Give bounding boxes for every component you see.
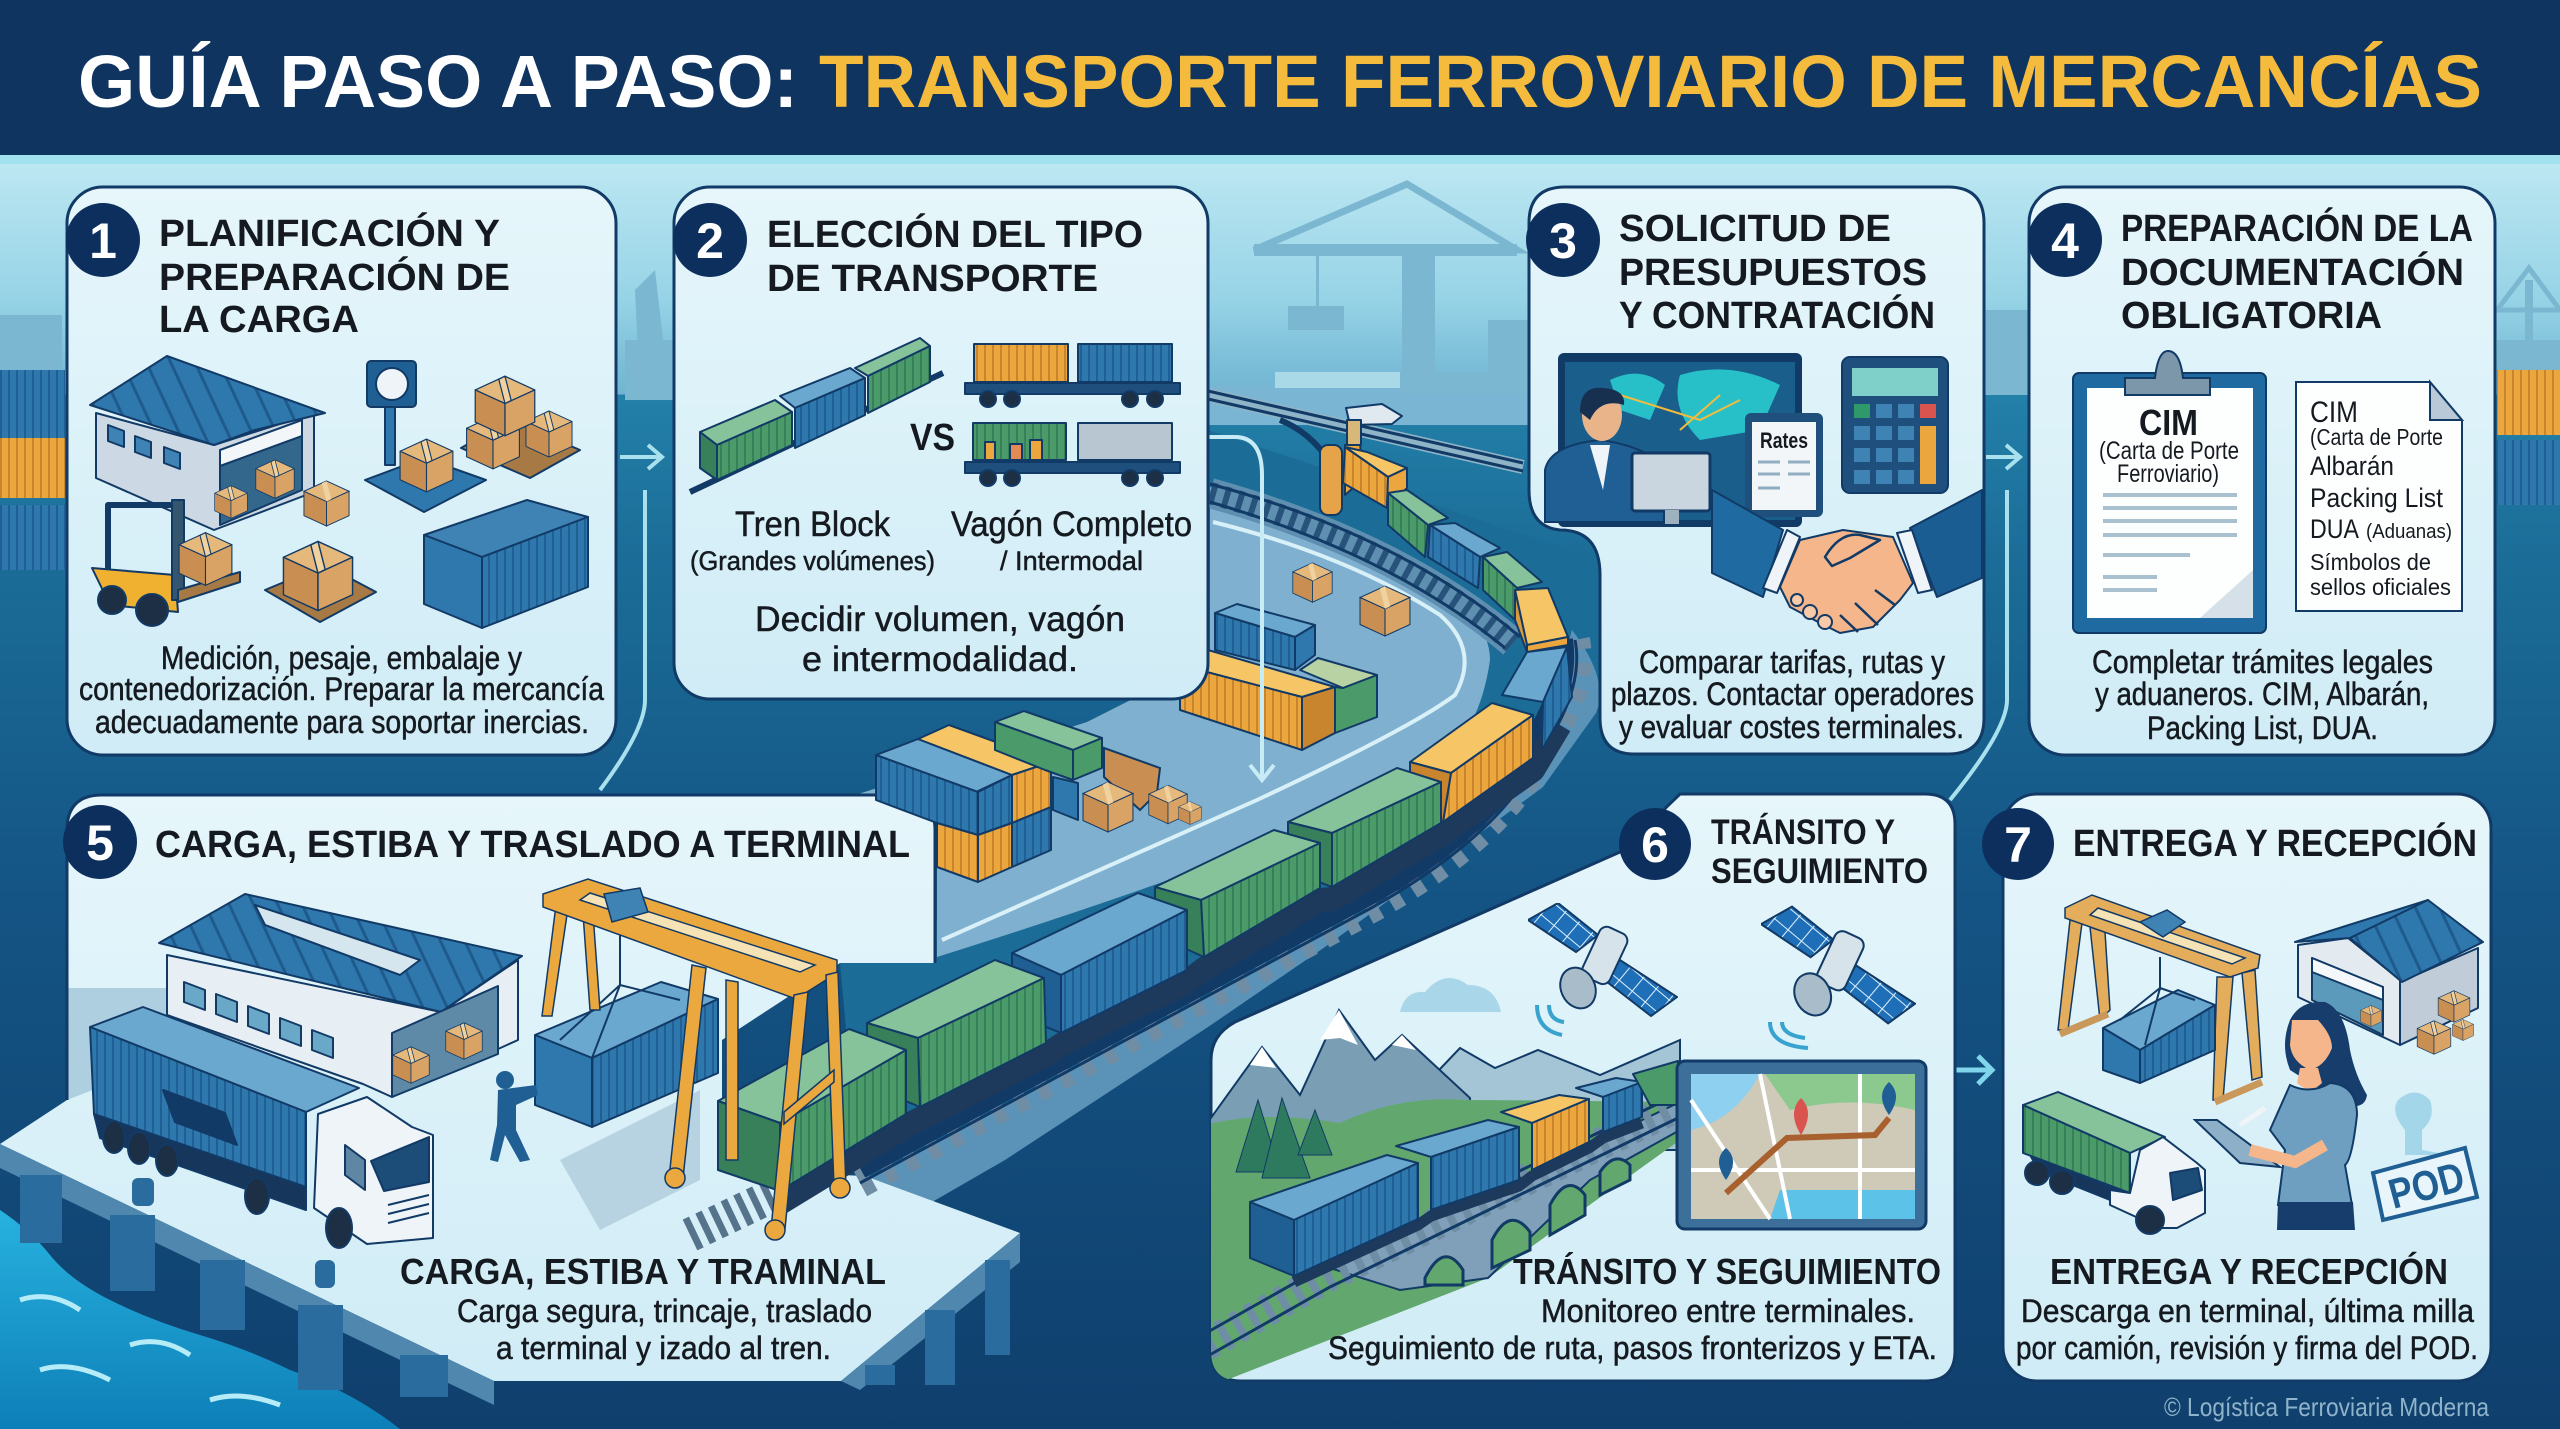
step 5 body	[457, 1293, 872, 1366]
body	[1611, 644, 1974, 745]
option labels: / Intermodal	[1000, 546, 1143, 576]
step 5 heading: CARGA, ESTIBA Y TRASLADO A TERMINAL	[155, 824, 910, 866]
icon: document list	[2296, 382, 2462, 611]
icon: rates tablet	[1745, 413, 1823, 517]
body: contenedorización. Preparar la mercancía	[79, 671, 604, 707]
subheading: TRÁNSITO Y SEGUIMIENTO	[1513, 1251, 1941, 1292]
wagon orange	[1410, 703, 1533, 822]
body: Packing List, DUA.	[2147, 710, 2378, 746]
wagon green mid	[1483, 552, 1542, 620]
icon: satellite 2	[1761, 907, 1915, 1023]
heading: Y CONTRATACIÓN	[1619, 293, 1935, 337]
subheading: ENTREGA Y RECEPCIÓN	[2050, 1250, 2448, 1292]
heading	[1619, 208, 1935, 337]
hanging container	[535, 930, 718, 1127]
option labels: Vagón Completo	[951, 505, 1192, 544]
icon: document list: Packing List	[2310, 483, 2443, 513]
arrow: step 3 to 4	[1950, 445, 2020, 800]
body	[1328, 1293, 1937, 1366]
right stacked containers	[2497, 370, 2560, 505]
pier	[0, 1144, 1020, 1405]
panel 5 content	[90, 879, 850, 1288]
freight train	[718, 404, 1572, 1203]
icon: clipboard CIM	[2073, 351, 2266, 633]
panel 1	[66, 187, 616, 755]
icon: warehouse	[90, 356, 325, 530]
arrow: step 2 to 5	[1208, 437, 1274, 780]
arrow: step 1 to 2	[600, 445, 662, 790]
option labels: (Grandes volúmenes)	[690, 546, 935, 576]
icon: rates tablet: Rates	[1760, 428, 1808, 453]
wagon chassis	[780, 725, 1560, 1203]
left stacked containers	[0, 370, 65, 570]
body	[2016, 1293, 2478, 1366]
icon: pallet box	[265, 541, 376, 622]
locomotive	[1320, 404, 1402, 515]
icon: document list: Albarán	[2310, 451, 2394, 481]
heading	[767, 212, 1143, 300]
body: Decidir volumen, vagón	[755, 600, 1125, 639]
light band beside track	[860, 630, 1600, 1232]
step number	[1526, 203, 1600, 277]
apron cargo: blue, orange and green containers	[1180, 604, 1377, 750]
icon: satellite 1	[1528, 903, 1677, 1016]
step number: 2	[696, 213, 724, 269]
heading: ENTREGA Y RECEPCIÓN	[2073, 821, 2477, 865]
body: Medición, pesaje, embalaje y	[161, 640, 522, 676]
icon: map monitor	[1558, 353, 1802, 527]
icon: document list: DUA	[2310, 514, 2359, 544]
heading	[159, 211, 510, 341]
bollards	[132, 1178, 335, 1288]
heading: DE TRANSPORTE	[767, 258, 1098, 300]
body	[2092, 644, 2433, 746]
icon: document list: Símbolos de	[2310, 549, 2431, 575]
wagon orange far	[1343, 447, 1407, 508]
step 5 subheading: CARGA, ESTIBA Y TRAMINAL	[400, 1251, 886, 1292]
body: adecuadamente para soportar inercias.	[95, 704, 589, 740]
wagon blue curve	[1502, 647, 1572, 750]
icon: container	[424, 500, 588, 628]
wagon green 4	[1288, 768, 1441, 887]
body: Seguimiento de ruta, pasos fronterizos y ETA.	[1328, 1330, 1937, 1366]
rails	[1206, 1105, 1680, 1345]
icon: wagon with containers	[965, 344, 1180, 407]
arrow: step 6 to 7	[1955, 1056, 1992, 1084]
inner curved track	[1210, 484, 1520, 648]
icon: clipboard CIM: CIM	[2139, 402, 2198, 443]
body: plazos. Contactar operadores	[1611, 676, 1974, 712]
step number: 7	[2004, 817, 2032, 873]
port skyline silhouettes	[0, 184, 2560, 400]
heading	[1711, 812, 1928, 891]
heading: DOCUMENTACIÓN	[2121, 250, 2464, 294]
step number	[66, 203, 140, 277]
wagon blue	[1012, 893, 1187, 1033]
panel 5 floor	[0, 795, 1020, 1381]
wagon orange curve	[1515, 588, 1568, 652]
body	[79, 640, 604, 740]
icon: block train	[690, 338, 943, 492]
body: y aduaneros. CIM, Albarán,	[2095, 676, 2429, 712]
icon: POD stamp	[2373, 1092, 2477, 1220]
icon: forklift	[92, 500, 240, 626]
icon: full wagon	[965, 423, 1180, 486]
straight rear tracks	[1208, 391, 1523, 471]
body: Comparar tarifas, rutas y	[1639, 644, 1945, 680]
heading	[2121, 206, 2473, 337]
step number: 4	[2051, 213, 2079, 269]
icon: document list: CIM	[2310, 396, 2358, 429]
teal ground around train	[840, 430, 1600, 1183]
icon: clipboard CIM: Ferroviario)	[2117, 460, 2219, 488]
step number	[2028, 203, 2102, 277]
body: Monitoreo entre terminales.	[1541, 1293, 1915, 1329]
panel 6	[1206, 794, 1955, 1381]
worker	[490, 1071, 538, 1162]
heading: PREPARACIÓN DE LA	[2121, 206, 2473, 250]
apron cargo: container stack	[876, 725, 1051, 882]
icon: box	[304, 481, 349, 526]
icon: document list: (Carta de Porte	[2310, 424, 2443, 450]
trees	[1236, 1098, 1332, 1178]
footer credit: © Logística Ferroviaria Moderna	[2164, 1392, 2489, 1422]
gantry crane	[542, 879, 850, 1240]
wagon green 1	[718, 1029, 906, 1191]
icon: woman with clipboard	[2195, 1002, 2367, 1230]
body: e intermodalidad.	[802, 640, 1078, 679]
icon: hanging container	[2103, 957, 2215, 1083]
option labels: Tren Block	[735, 505, 890, 544]
heading: SEGUIMIENTO	[1711, 852, 1928, 891]
heading: PLANIFICACIÓN Y	[159, 211, 500, 255]
title bar	[0, 0, 2560, 164]
body: por camión, revisión y firma del POD.	[2016, 1330, 2478, 1366]
train on viaduct	[1250, 1061, 1678, 1282]
icon: scale	[365, 361, 486, 512]
icon: POD stamp: POD	[2384, 1153, 2469, 1218]
step number: 6	[1641, 817, 1669, 873]
landscape	[1206, 1010, 1680, 1381]
heading: OBLIGATORIA	[2121, 295, 2382, 337]
body: Completar trámites legales	[2092, 644, 2433, 680]
panel 7	[1982, 794, 2491, 1381]
step 5 body: a terminal y izado al tren.	[496, 1330, 831, 1366]
icon: truck	[2023, 1092, 2205, 1234]
step number	[1982, 808, 2054, 880]
heading: PREPARACIÓN DE	[159, 255, 510, 299]
terminal apron	[855, 487, 1490, 957]
step number	[1619, 808, 1691, 880]
central horizon	[1208, 385, 1533, 425]
apron cargo: green container	[995, 711, 1102, 820]
icon: gantry crane	[2058, 895, 2262, 1102]
step number: 1	[89, 213, 117, 269]
warehouse	[159, 894, 522, 1097]
icon: person at computer	[1545, 388, 1710, 524]
step 5 number: 5	[86, 815, 114, 871]
option labels	[690, 505, 1192, 576]
icon: cloud	[1400, 978, 1501, 1012]
title	[78, 40, 2482, 123]
step number	[673, 203, 747, 277]
heading: PRESUPUESTOS	[1619, 252, 1927, 294]
short track on the floor	[690, 1192, 780, 1235]
label: vs: VS	[910, 417, 955, 459]
water	[0, 1210, 400, 1429]
panel 3	[1526, 187, 1984, 754]
body: y evaluar costes terminales.	[1619, 709, 1964, 745]
main track	[860, 640, 1577, 1183]
heading: TRÁNSITO Y	[1711, 812, 1895, 852]
icon: map tablet	[1677, 1061, 1926, 1229]
panel 2	[673, 187, 1208, 699]
step 5 body: Carga segura, trincaje, traslado	[457, 1293, 872, 1329]
wagon blue far	[1428, 523, 1500, 588]
apron cargo: loose boxes	[1083, 563, 1410, 832]
icon: handshake	[1712, 490, 1982, 633]
icon: document list: (Aduanas)	[2366, 521, 2452, 543]
heading: SOLICITUD DE	[1619, 208, 1891, 250]
panel 4	[2028, 187, 2495, 755]
wagon green far	[1388, 490, 1448, 557]
icon: calculator	[1842, 357, 1948, 493]
wagon green 2	[867, 960, 1046, 1107]
truck	[90, 1007, 433, 1248]
viaduct	[1330, 1102, 1680, 1290]
icon: document list: sellos oficiales	[2310, 574, 2451, 600]
title: GUÍA PASO A PASO:	[78, 40, 798, 123]
heading: LA CARGA	[159, 299, 359, 341]
wagon green 3	[1155, 830, 1320, 957]
step 5 number	[63, 805, 137, 879]
icon: clipboard CIM: (Carta de Porte	[2099, 437, 2239, 465]
icon: stacked boxes on pallet	[461, 376, 580, 478]
icon: warehouse	[2295, 900, 2483, 1054]
heading: ELECCIÓN DEL TIPO	[767, 212, 1143, 256]
body: Descarga en terminal, última milla	[2021, 1293, 2474, 1329]
step number: 3	[1549, 213, 1577, 269]
icon: signal waves	[1537, 1005, 1808, 1048]
title: TRANSPORTE FERROVIARIO DE MERCANCÍAS	[819, 40, 2482, 123]
body	[755, 600, 1125, 679]
